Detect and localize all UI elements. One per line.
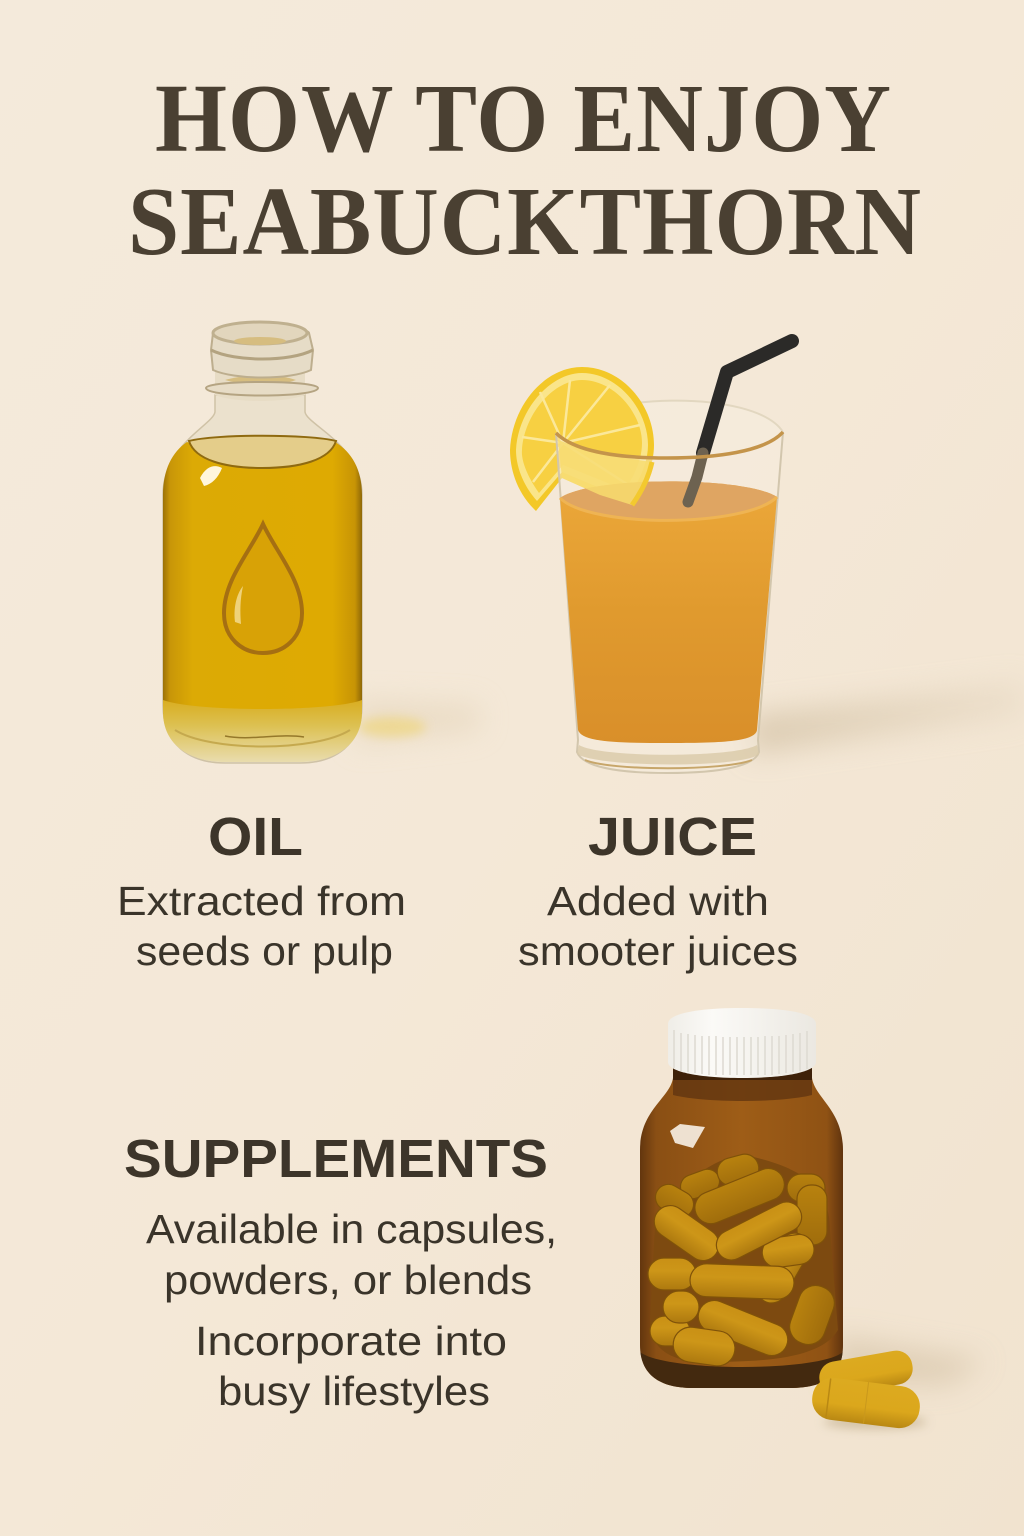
capsule cluster backing bbox=[650, 1155, 838, 1362]
icon: oil bottle bbox=[163, 322, 480, 763]
title bbox=[128, 65, 922, 275]
straw bbox=[703, 341, 792, 453]
icon: supplement jar bbox=[640, 1008, 985, 1430]
label: juice: JUICE bbox=[588, 807, 757, 867]
glass shadow bbox=[750, 682, 1024, 755]
label: juice: smooter juices bbox=[518, 928, 798, 974]
glass front bbox=[556, 432, 783, 773]
label: supplements: Available in capsules, bbox=[146, 1206, 557, 1252]
label: supplements: SUPPLEMENTS bbox=[124, 1129, 548, 1189]
label: oil bbox=[117, 807, 406, 974]
lemon through glass bbox=[558, 440, 652, 505]
label: juice: Added with bbox=[547, 878, 769, 924]
label: supplements bbox=[124, 1129, 557, 1414]
title: HOW TO ENJOY bbox=[155, 65, 892, 172]
title: SEABUCKTHORN bbox=[128, 168, 922, 275]
capsules in jar bbox=[648, 1151, 839, 1368]
label: supplements: Incorporate into bbox=[195, 1318, 507, 1364]
label: supplements: powders, or blends bbox=[164, 1257, 532, 1303]
back of glass bbox=[556, 401, 783, 458]
label: juice bbox=[518, 807, 798, 974]
label: supplements: busy lifestyles bbox=[218, 1368, 490, 1414]
label: oil: OIL bbox=[208, 807, 303, 867]
loose capsules bbox=[810, 1348, 927, 1430]
jar lid bbox=[668, 1008, 816, 1078]
label: oil: seeds or pulp bbox=[136, 928, 393, 974]
lemon slice bbox=[510, 367, 654, 511]
icon: oil drop bbox=[224, 524, 302, 653]
jar shadow bbox=[835, 1335, 985, 1385]
label: oil: Extracted from bbox=[117, 878, 406, 924]
icon: juice glass bbox=[510, 341, 1024, 773]
